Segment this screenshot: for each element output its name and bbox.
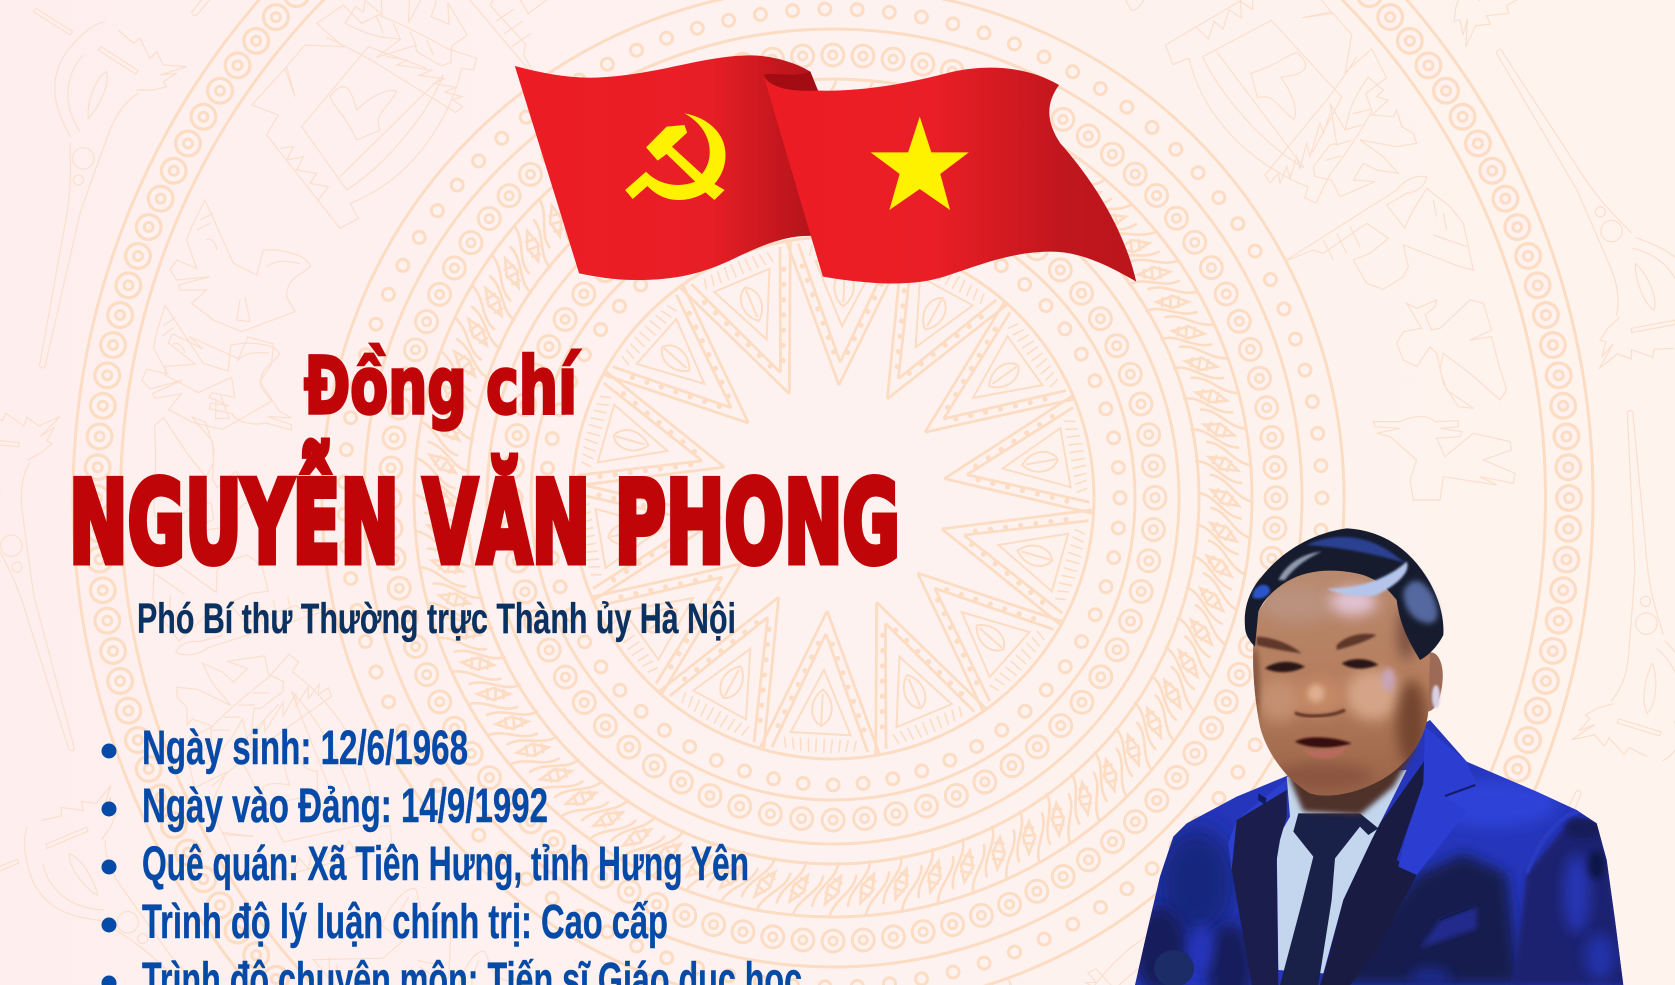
subtitle: position: Phó Bí thư Thường trực Thành ủy Hà Nội — [137, 595, 736, 643]
head — [1245, 528, 1443, 796]
eyes — [1265, 659, 1378, 672]
ear — [1422, 652, 1443, 712]
mouth — [1295, 737, 1352, 759]
item: home town: Quê quán: Xã Tiên Hưng, tỉnh Hưng Yên — [142, 838, 749, 891]
suit and shirt — [1133, 720, 1627, 985]
item: date of birth: Ngày sinh: 12/6/1968 — [142, 722, 468, 775]
item: home town — [102, 838, 749, 891]
portrait of Nguyễn Văn Phong — [1133, 528, 1627, 985]
nostrils — [1295, 710, 1345, 716]
left flag: Party flag — [515, 55, 818, 280]
item: political theory level: Trình độ lý luận chính trị: Cao cấp — [142, 896, 668, 949]
item: political theory level — [102, 896, 668, 949]
item: date of birth — [102, 722, 468, 775]
left lapel — [1232, 790, 1287, 985]
hair — [1245, 528, 1443, 660]
item: party admission date: Ngày vào Đảng: 14/9/1992 — [142, 780, 548, 833]
biography list — [102, 722, 802, 985]
right lapel — [1320, 760, 1425, 985]
neck shadow — [1287, 747, 1417, 815]
right flag: national flag — [763, 68, 1136, 284]
item: professional qualification — [102, 954, 802, 985]
microphone — [1154, 950, 1194, 985]
icon: hammer and sickle — [625, 113, 726, 200]
tie — [1280, 813, 1378, 985]
heading: name: NGUYỄN VĂN PHONG — [69, 441, 900, 589]
icon: yellow star — [871, 117, 969, 210]
title: Đồng chí: Đồng chí — [304, 342, 580, 432]
lit lapel — [1398, 727, 1477, 875]
face — [1253, 563, 1430, 796]
eyebrows — [1257, 634, 1377, 653]
flag: Party and national flags — [515, 55, 1136, 284]
item: party admission date — [102, 780, 548, 833]
